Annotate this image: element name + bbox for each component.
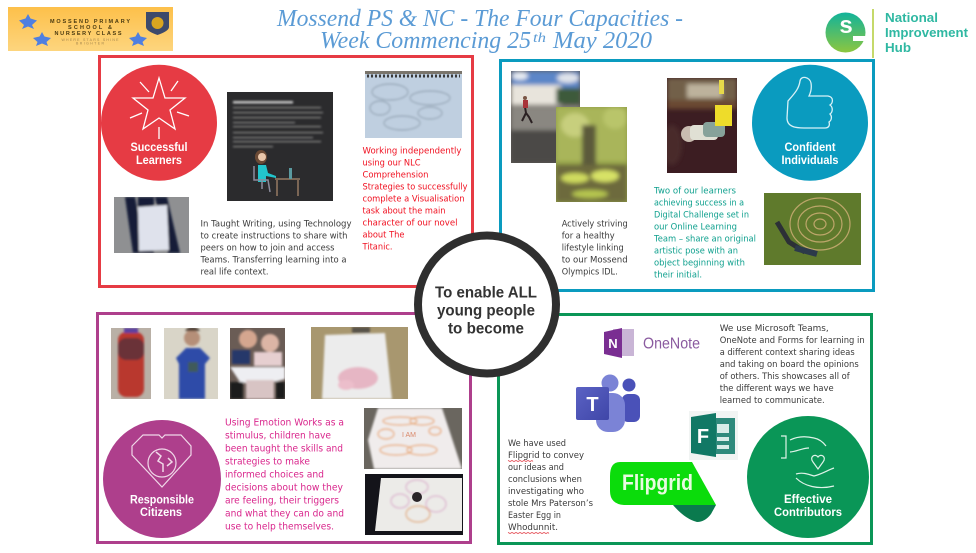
title: Week Commencing 25 — [320, 28, 531, 54]
school logo banner: SCHOOL & — [68, 25, 112, 31]
badge: responsible citizens: Citizens — [140, 507, 182, 519]
panel: responsible citizens — [98, 314, 470, 542]
text: Microsoft tools description: We use Microsoft Teams, — [720, 324, 829, 334]
badge: effective contributors — [747, 416, 869, 538]
text: comprehension strategies description: using our NLC — [362, 158, 420, 168]
panel: confident individuals — [500, 60, 874, 290]
text: emotion works description: informed choices and — [225, 470, 324, 480]
photo: two children in high chair — [230, 328, 285, 399]
text: emotion works description: stimulus, children have — [225, 430, 331, 442]
text: emotion works description: strategies to make — [225, 456, 310, 468]
photo: handwritten instructions — [114, 197, 189, 253]
icon: OneNote logo: N — [608, 336, 618, 351]
badge: confident individuals — [752, 65, 868, 181]
text: comprehension strategies description: complete a Visualisation — [362, 194, 464, 204]
school logo banner: WHERE STARS SHINE — [62, 38, 119, 42]
panel: effective contributors — [498, 314, 872, 544]
text: emotion works description: decisions about how they — [225, 482, 343, 494]
National Improvement Hub logo: Hub — [885, 40, 911, 55]
photo: forest — [556, 107, 627, 202]
text: healthy lifestyle description: Olympics IDL. — [562, 268, 618, 278]
text: healthy lifestyle description: to our Mossend — [562, 256, 628, 266]
National Improvement Hub logo: s — [839, 12, 853, 39]
text: taught writing description: real life context. — [200, 268, 268, 278]
photo: child with yellow block — [662, 78, 737, 173]
photo: emotion bottle — [111, 328, 151, 399]
icon: Flipgrid logo: Flipgrid — [622, 470, 693, 495]
central circle callout — [418, 236, 556, 374]
National Improvement Hub logo — [826, 9, 969, 58]
title — [276, 6, 683, 54]
text: emotion works description: use to help themselves. — [225, 522, 334, 532]
text: taught writing description: In Taught Writing, using Technology — [200, 220, 352, 230]
icon: Microsoft Teams logo — [576, 374, 640, 432]
text: Microsoft tools description: and taking on board the opinions — [720, 360, 859, 370]
text: digital challenge description: achieving success in a — [654, 198, 744, 208]
text: emotion works description: Using Emotion Works as a — [225, 418, 344, 428]
text: healthy lifestyle description: for a healthy — [562, 232, 615, 242]
text: digital challenge description: their initial. — [654, 270, 702, 280]
text: digital challenge description: object beginning with — [654, 258, 745, 268]
school logo banner: NURSERY CLASS — [54, 31, 122, 37]
icon: OneNote logo — [604, 328, 700, 358]
text: Flipgrid description: investigating who — [508, 487, 584, 497]
text: taught writing description: to create instructions to share with — [200, 232, 348, 242]
text: Microsoft tools description: OneNote and Forms for learning in — [720, 336, 865, 346]
text: comprehension strategies description: Comprehension — [362, 170, 428, 180]
text: digital challenge description: our Online Learning — [654, 222, 737, 232]
text: Flipgrid description: stole Mrs Paterson’s — [508, 499, 593, 509]
badge: responsible citizens: Responsible — [130, 494, 194, 506]
text: Microsoft tools description: learned to communicate. — [720, 396, 825, 406]
central circle callout: young people — [437, 302, 535, 320]
text: Microsoft tools description: a different context sharing ideas — [720, 348, 855, 358]
icon: Microsoft Forms logo: F — [697, 426, 709, 448]
icon: OneNote logo: OneNote — [643, 336, 700, 352]
title: May 2020 — [552, 28, 652, 54]
text: Flipgrid description: Whodunnit. — [508, 523, 558, 533]
text: emotion works description: and what they can do and — [225, 508, 344, 520]
school logo banner: MOSSEND PRIMARY — [50, 19, 130, 25]
photo: visualisation notebook — [365, 71, 462, 138]
text: Flipgrid description: Easter Egg in — [508, 511, 561, 521]
text: emotion works description: been taught the skills and — [225, 444, 343, 454]
photo: teams instructions on dark slide — [227, 92, 333, 201]
text: Flipgrid description: Flipgrid to convey — [508, 451, 585, 461]
panel: successful learners — [100, 56, 472, 286]
badge: confident individuals: Individuals — [782, 155, 838, 167]
photo: child running — [511, 71, 580, 163]
photo: I am mind map — [364, 408, 462, 469]
school logo banner: BRIGHTER — [76, 42, 104, 46]
text: Microsoft tools description — [720, 324, 865, 406]
badge: responsible citizens — [103, 420, 221, 538]
text: digital challenge description: Team – share an original — [653, 234, 756, 244]
text: taught writing description: Teams. Transferring learning into a — [200, 256, 346, 266]
text: comprehension strategies description: task about the main — [362, 206, 446, 216]
photo: pink flower drawing — [311, 327, 408, 399]
text: Flipgrid description — [508, 439, 593, 534]
text: comprehension strategies description: Working independently — [362, 146, 462, 156]
text: Flipgrid description: our ideas and — [508, 463, 564, 473]
central circle callout: To enable ALL — [435, 284, 537, 302]
text: digital challenge description: Two of our learners — [653, 186, 736, 196]
badge: successful learners: Learners — [136, 155, 182, 167]
badge: successful learners — [101, 65, 217, 181]
text: digital challenge description — [653, 186, 756, 280]
central circle callout: to become — [448, 320, 524, 338]
text: healthy lifestyle description: Actively striving — [562, 220, 628, 230]
icon: Microsoft Forms logo — [689, 411, 738, 460]
text: healthy lifestyle description: lifestyle linking — [562, 244, 624, 254]
text: Flipgrid description: conclusions when — [508, 475, 582, 485]
title: th — [533, 31, 546, 46]
badge: successful learners: Successful — [130, 142, 188, 154]
school logo banner — [8, 7, 173, 51]
text: comprehension strategies description — [362, 146, 468, 252]
badge: confident individuals: Confident — [784, 142, 836, 154]
photo: rope spiral on grass — [764, 193, 861, 265]
text: emotion works description: are feeling, their triggers — [225, 496, 339, 506]
text: comprehension strategies description: about The — [362, 230, 405, 240]
photo: boy with bottle — [164, 327, 218, 399]
text: comprehension strategies description: Strategies to successfully — [362, 182, 468, 192]
icon: Flipgrid logo — [610, 462, 716, 522]
text: taught writing description — [200, 220, 352, 278]
text: Microsoft tools description: the different ways we have — [720, 384, 834, 394]
badge: effective contributors: Contributors — [774, 507, 842, 519]
National Improvement Hub logo: National — [885, 10, 938, 25]
photo: I am mind map: I AM — [402, 432, 416, 439]
text: digital challenge description: artistic pose with an — [654, 246, 738, 256]
icon: Microsoft Teams logo: T — [586, 394, 599, 416]
National Improvement Hub logo: Improvement — [885, 25, 969, 40]
badge: effective contributors: Effective — [784, 494, 832, 506]
text: Flipgrid description: We have used — [508, 439, 566, 449]
text: Microsoft tools description: of others. This showcases all of — [720, 372, 850, 382]
title: Mossend PS & NC - The Four Capacities - — [276, 6, 683, 32]
text: digital challenge description: Digital Challenge set in — [654, 210, 749, 220]
photo: feelings poster — [365, 474, 463, 535]
text: healthy lifestyle description — [562, 220, 628, 278]
text: emotion works description — [225, 418, 344, 532]
text: comprehension strategies description: character of our novel — [362, 218, 458, 228]
text: taught writing description: peers on how to join and access — [200, 244, 335, 254]
text: comprehension strategies description: Titanic. — [362, 242, 392, 252]
